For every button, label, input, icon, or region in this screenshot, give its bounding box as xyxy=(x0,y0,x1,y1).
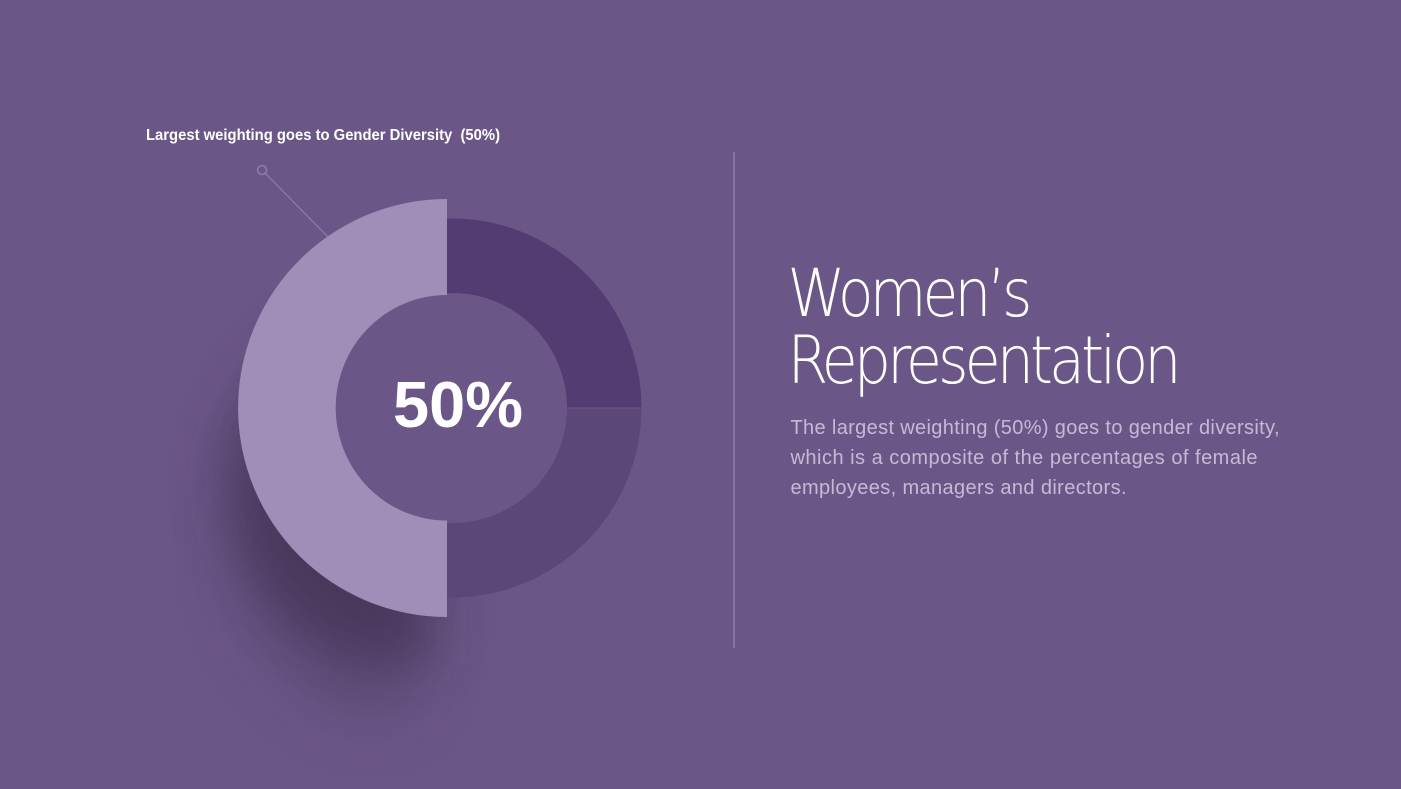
body text: employees, managers and directors. xyxy=(790,477,1126,499)
title: Representation xyxy=(788,322,1178,399)
cast shadow xyxy=(225,300,430,665)
center value: 50% xyxy=(393,368,523,441)
title xyxy=(788,255,1178,399)
center disc xyxy=(336,293,567,523)
vertical divider xyxy=(733,152,735,648)
title: Women’s xyxy=(788,255,1029,332)
callout label: Largest weighting goes to Gender Diversity (50%) xyxy=(146,127,500,144)
wide soft shadow xyxy=(245,380,426,715)
donut chart xyxy=(225,199,642,715)
leader line with circle marker xyxy=(258,166,328,237)
body text xyxy=(790,417,1280,499)
body text: which is a composite of the percentages of female xyxy=(790,447,1258,469)
segment: medium lower right xyxy=(447,408,642,597)
body text: The largest weighting (50%) goes to gender diversity, xyxy=(790,417,1280,439)
segment: highlighted 50 percent xyxy=(238,199,447,617)
segment: dark upper right xyxy=(447,219,642,408)
